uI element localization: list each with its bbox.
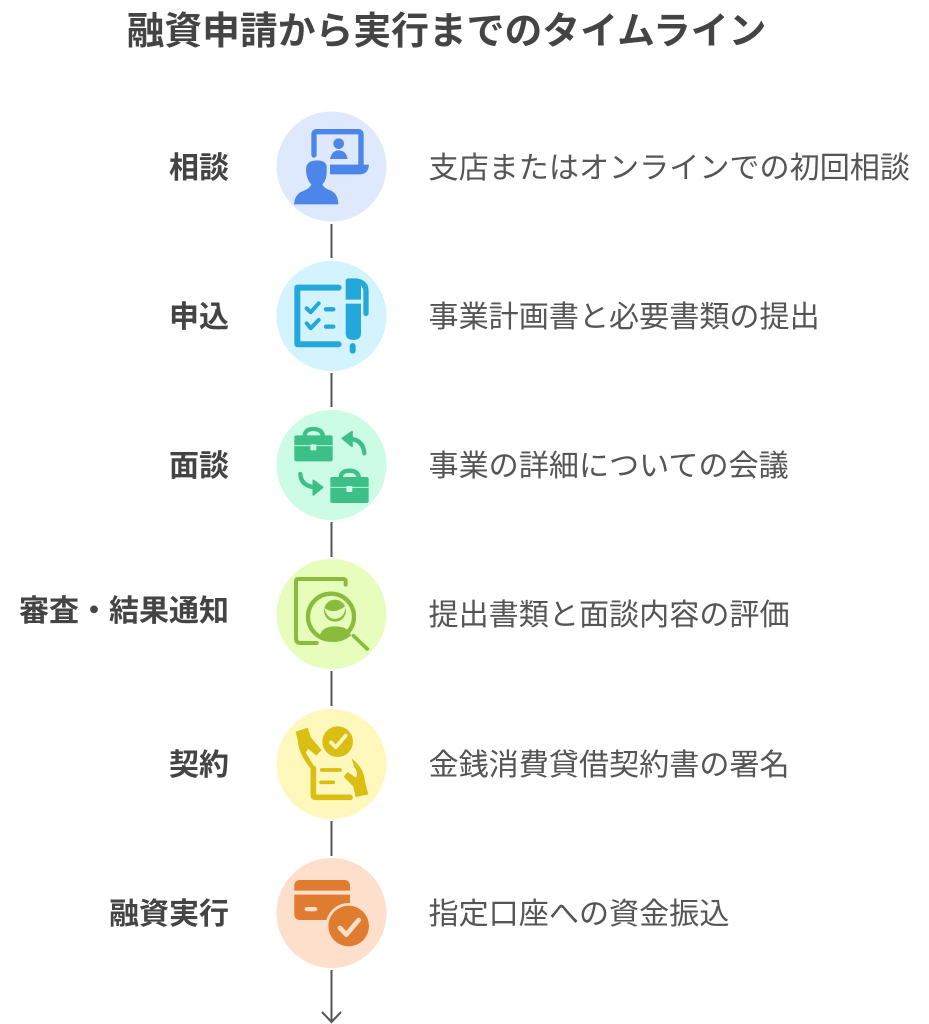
label: 審査・結果通知: 審査・結果通知	[19, 595, 229, 628]
circle icon: signing contract	[276, 709, 386, 819]
arrow head	[322, 1012, 341, 1022]
step 3: 面談	[169, 410, 789, 520]
circle icon: document with magnifier	[276, 559, 386, 669]
circle icon: checklist and pen	[276, 261, 386, 371]
connector lines	[330, 224, 332, 1022]
description: 事業計画書と必要書類の提出	[428, 301, 820, 334]
description: 支店またはオンラインでの初回相談	[428, 152, 910, 185]
label: 融資実行: 融資実行	[109, 898, 229, 931]
label: 契約: 契約	[169, 749, 229, 782]
circle icon: video consultation	[276, 112, 386, 222]
label: 相談: 相談	[169, 152, 229, 185]
step 5: 契約	[169, 709, 790, 819]
description: 事業の詳細についての会議	[428, 450, 789, 483]
step 4: 審査・結果通知	[19, 559, 790, 669]
title: 融資申請から実行までのタイムライン	[126, 11, 766, 53]
description: 金銭消費貸借契約書の署名	[428, 749, 790, 782]
circle icon: card with check	[276, 858, 386, 968]
label: 面談: 面談	[169, 450, 229, 483]
label: 申込: 申込	[169, 301, 229, 334]
step 6: 融資実行	[109, 858, 729, 968]
step 1: 相談	[169, 112, 910, 222]
step 2: 申込	[169, 261, 820, 371]
description: 提出書類と面談内容の評価	[428, 599, 790, 632]
circle icon: exchanging briefcases	[276, 410, 386, 520]
description: 指定口座への資金振込	[428, 898, 729, 931]
